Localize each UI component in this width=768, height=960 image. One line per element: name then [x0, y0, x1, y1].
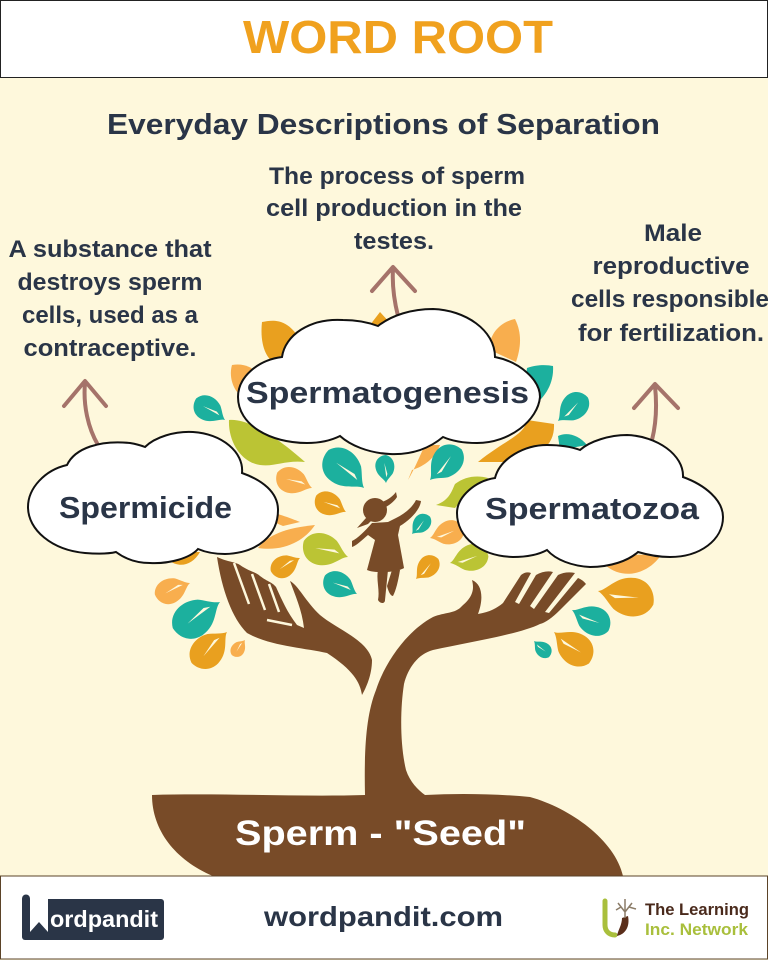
- definition: spermatozoa: reproductive: [592, 253, 750, 280]
- definition: spermatozoa: [571, 220, 768, 347]
- website: wordpandit.com: [263, 901, 503, 932]
- definition: spermatogenesis: testes.: [354, 228, 434, 255]
- definition: spermatogenesis: [266, 163, 525, 255]
- cloud: spermicide: [28, 432, 278, 563]
- definition: spermicide: A substance that: [8, 236, 212, 263]
- title: WORD ROOT: [243, 11, 553, 63]
- logo: the learning inc network: Inc. Network: [645, 920, 749, 939]
- definition: spermatozoa: cells responsible: [571, 286, 768, 313]
- header band: [0, 0, 768, 78]
- label: Spermatogenesis: [246, 375, 529, 410]
- child silhouette: [352, 492, 421, 603]
- subtitle: Everyday Descriptions of Separation: [107, 109, 660, 141]
- definition: spermatozoa: for fertilization.: [578, 320, 764, 347]
- logo: wordpandit: ordpandit: [50, 906, 158, 932]
- logo: the learning inc network: The Learning: [645, 900, 749, 919]
- arrow: spermatozoa: [634, 384, 678, 440]
- ground label: Sperm - "Seed": [235, 814, 526, 853]
- definition: spermatozoa: Male: [644, 220, 702, 247]
- cloud: spermatogenesis: [238, 309, 540, 454]
- logo: wordpandit: [22, 894, 164, 940]
- definition: spermatogenesis: The process of sperm: [269, 163, 525, 190]
- logo: the learning inc network: [605, 899, 749, 939]
- label: Spermatozoa: [485, 491, 700, 526]
- definition: spermicide: contraceptive.: [24, 335, 196, 362]
- label: Spermicide: [59, 490, 232, 525]
- cloud: spermatozoa: [457, 435, 723, 567]
- leaves: [151, 312, 661, 676]
- definition: spermicide: destroys sperm: [18, 269, 202, 296]
- definition: spermatogenesis: cell production in the: [266, 195, 522, 222]
- tree icon: [616, 899, 636, 918]
- definition: spermicide: cells, used as a: [22, 302, 199, 329]
- arrow: spermicide: [64, 381, 106, 445]
- tree with right hand and ground: [152, 571, 623, 876]
- footer band: [0, 876, 768, 959]
- definition: spermicide: [8, 236, 212, 362]
- arrow: spermatogenesis: [372, 267, 415, 316]
- left hand: [217, 557, 372, 695]
